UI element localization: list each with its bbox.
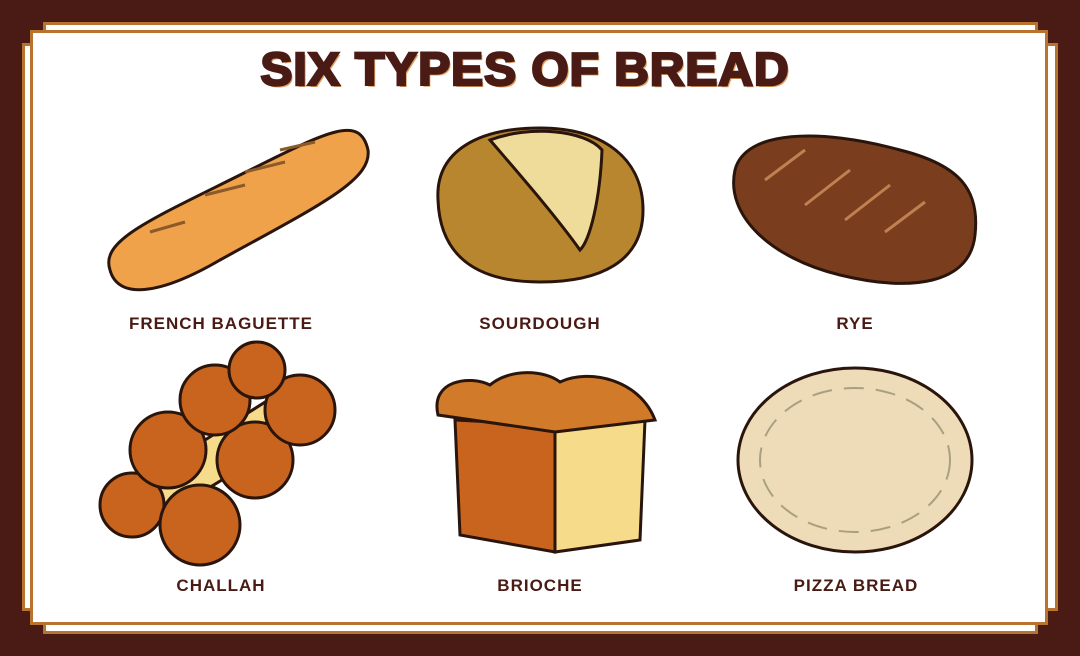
label: sourdough: SOURDOUGH <box>479 314 601 333</box>
label: french baguette: FRENCH BAGUETTE <box>129 314 313 333</box>
label: rye: RYE <box>836 314 874 333</box>
icon: sourdough <box>438 128 643 282</box>
icon: baguette <box>109 130 368 290</box>
icon: brioche <box>437 373 655 552</box>
icon: rye <box>734 136 976 283</box>
label: brioche: BRIOCHE <box>497 576 583 595</box>
title: SIX TYPES OF BREAD <box>260 43 790 95</box>
icon: pizza bread <box>738 368 972 552</box>
label: challah: CHALLAH <box>176 576 266 595</box>
label: pizza bread: PIZZA BREAD <box>794 576 918 595</box>
icon: challah <box>100 342 335 565</box>
